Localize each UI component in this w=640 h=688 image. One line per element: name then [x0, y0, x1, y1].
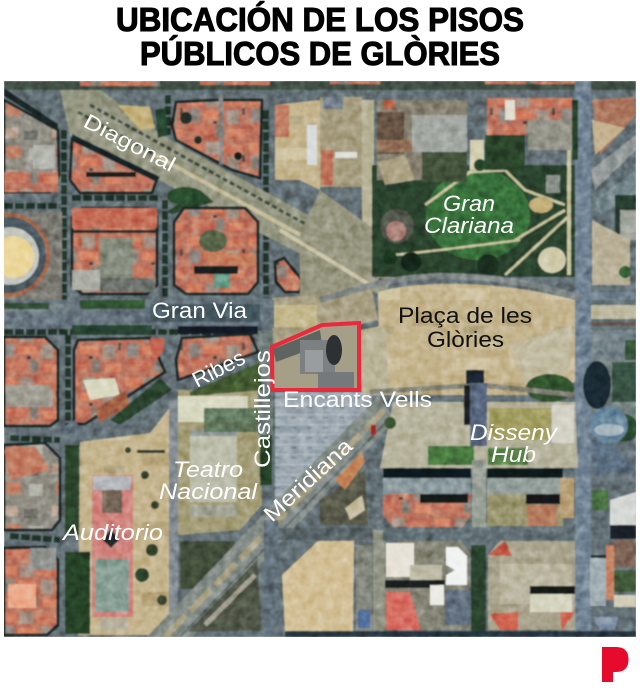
label: Ribes: Ribes	[188, 345, 249, 392]
title: UBICACIÓN DE LOS PISOS	[116, 1, 524, 38]
diagonal avenue	[60, 90, 395, 298]
tree lined streets	[4, 95, 266, 540]
title: PÚBLICOS DE GLÒRIES	[140, 35, 500, 72]
red outline: pisos públicos	[272, 323, 359, 390]
blocks lower	[385, 541, 470, 630]
label: Plaça de les Glòries	[398, 303, 532, 352]
rail wedge	[320, 470, 368, 525]
label: Encants Vells: Encants Vells	[283, 387, 432, 412]
red car	[371, 425, 376, 435]
label: Auditorio: Auditorio	[61, 520, 163, 545]
label: Meridiana: Meridiana	[258, 433, 358, 527]
block top centre	[172, 100, 262, 178]
small block at corner	[275, 258, 302, 292]
label: Disseny Hub: Disseny	[470, 420, 559, 445]
selected plot interior	[273, 324, 358, 389]
curved road	[320, 276, 580, 300]
dome	[591, 360, 636, 440]
triangular block	[70, 139, 157, 193]
label: Gran Via: Gran Via	[152, 298, 248, 323]
green stripes	[166, 190, 214, 214]
label: Plaça de les Glòries: Plaça de les	[398, 303, 532, 328]
blocks below disseny	[383, 468, 471, 478]
disseny tower	[466, 370, 484, 384]
left blocks	[4, 337, 58, 426]
auditorio building	[92, 475, 133, 617]
block with patio	[174, 208, 258, 294]
label: Teatro Nacional	[159, 457, 258, 504]
vertical road by teatro	[169, 400, 178, 635]
label: Disseny Hub: Hub	[491, 442, 536, 467]
bullring	[4, 212, 62, 300]
label: Diagonal: Diagonal	[80, 110, 179, 177]
block with courtyard	[72, 208, 157, 294]
gran clariana park	[372, 165, 577, 277]
title	[116, 1, 524, 72]
label: Disseny Hub	[470, 420, 559, 467]
texture overlay	[4, 81, 636, 637]
buildings above park	[377, 100, 467, 180]
tree strip & auditorio ground	[78, 405, 178, 635]
Gran Via street	[4, 300, 274, 328]
label: Teatro Nacional: Nacional	[159, 479, 258, 504]
encants	[275, 392, 372, 515]
label: Plaça de les Glòries: Glòries	[427, 327, 504, 352]
label: Gran Clariana	[424, 191, 514, 238]
sand lot	[282, 541, 354, 632]
label: Teatro Nacional: Teatro	[173, 457, 243, 482]
block top left	[4, 100, 59, 192]
railway triangle	[187, 560, 262, 632]
vertical avenue right	[575, 81, 591, 641]
label: Gran Clariana: Gran	[443, 191, 495, 216]
Meridiana avenue	[147, 396, 395, 637]
ribes block	[176, 334, 258, 380]
block next to diagonal	[275, 100, 320, 190]
icon: red P logo	[602, 647, 628, 682]
castillejos road	[258, 330, 273, 435]
streets lower centre	[263, 519, 279, 560]
top row of blocks	[4, 81, 636, 90]
centre ground	[272, 290, 378, 345]
block second col lower	[74, 338, 165, 424]
right top	[592, 97, 636, 155]
plaça de les glòries	[378, 284, 575, 395]
label: Gran Clariana: Clariana	[424, 213, 514, 238]
teatro nacional	[178, 390, 262, 535]
label: Castillejos: Castillejos	[250, 350, 275, 468]
disseny plaza	[380, 402, 578, 468]
